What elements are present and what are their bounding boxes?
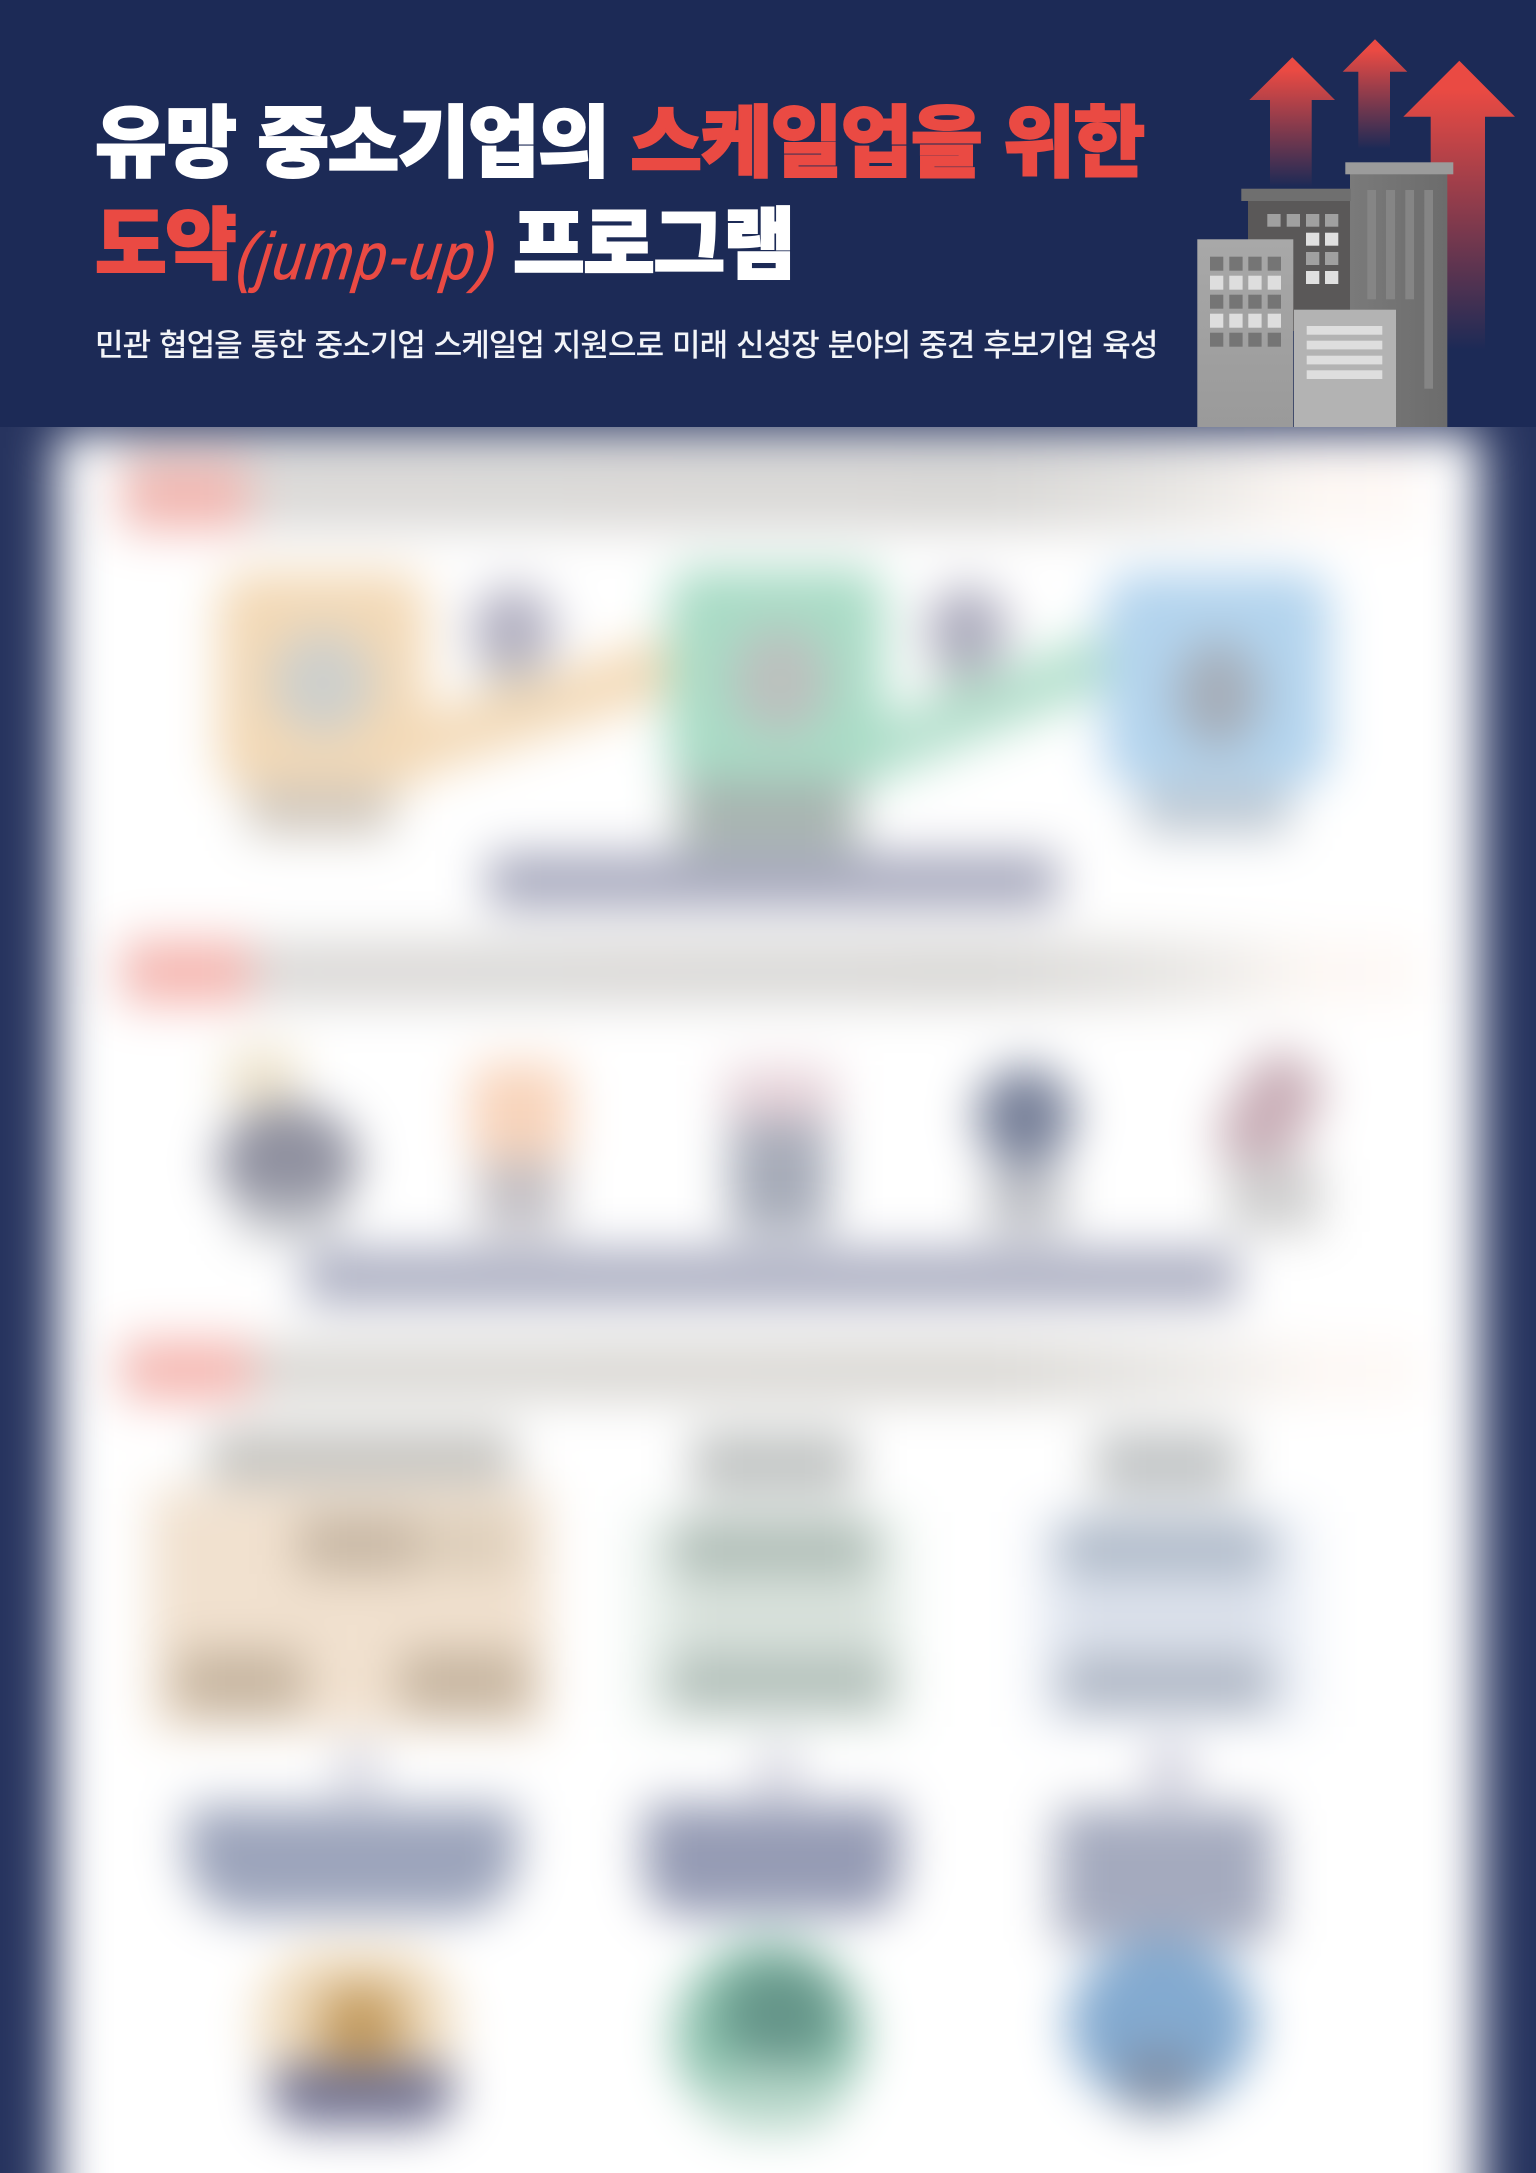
icon 5 (1204, 1038, 1336, 1187)
icon 3 top (725, 1066, 835, 1122)
connector 2 (756, 1746, 800, 1796)
column 1 circle halo (256, 1948, 456, 2066)
icon 2 label (478, 1160, 562, 1234)
column 1 heading (208, 1430, 514, 1484)
hero banner (0, 0, 1536, 427)
column 2 heading (692, 1430, 856, 1498)
connector icon 1 label (480, 665, 546, 689)
arrow: right (1403, 61, 1515, 350)
column 3 middle item (1060, 1590, 1274, 1640)
column 3 top item (1060, 1520, 1272, 1578)
column 1 lower left item (176, 1650, 304, 1716)
title jump-up handwriting: (jump-up) (233, 219, 503, 293)
column 2 circle core (720, 1962, 840, 2068)
building: left (1197, 239, 1293, 427)
building: back tall (1345, 162, 1453, 427)
building: front (1294, 310, 1396, 427)
flow shape: blue (1104, 572, 1330, 786)
section 3 heading band (120, 1342, 1420, 1400)
icon 3 body (730, 1120, 830, 1234)
column 3 navy box (1056, 1808, 1274, 1943)
blue shape label (1140, 785, 1290, 835)
subtitle: 민관 협업을 통한 중소기업 스케일업 지원으로 미래 신성장 분야의 중견 후보기업 육성 (95, 328, 1157, 363)
column 2 navy box (644, 1804, 902, 1916)
title line 2 program: 프로그램 (513, 201, 794, 289)
column 3 circle (1068, 1938, 1256, 2110)
section 2 heading band (120, 940, 1420, 1004)
flow arrow: green to blue (850, 623, 1140, 785)
column 3 circle base (1116, 2048, 1200, 2114)
title line 2 keyword: 도약 (95, 201, 235, 289)
column 1 lower right item (400, 1650, 528, 1716)
illustration: arrows and buildings (1197, 39, 1515, 427)
connector 1 (336, 1746, 380, 1796)
column 3 heading (1095, 1430, 1238, 1498)
section 1 badge (124, 462, 248, 530)
blue shape centre icon (1175, 640, 1261, 750)
column 1 circle core (318, 1985, 404, 2069)
icon 1 top (226, 1048, 298, 1108)
section 2 badge (124, 940, 250, 1004)
column 1 navy box (186, 1806, 518, 1916)
column 2 top item (672, 1520, 876, 1578)
connector icon 2 label (935, 665, 999, 689)
icon 5 label (1226, 1160, 1320, 1232)
orange shape centre icon (270, 630, 376, 736)
panel: white sheet (56, 432, 1481, 2173)
icon 4 label (986, 1165, 1064, 1235)
green shape centre icon (732, 628, 828, 734)
connector icon 2 (926, 586, 1008, 674)
icon 1 label (240, 1200, 340, 1238)
column 2 box (630, 1512, 912, 1727)
section 1 caption bar (488, 854, 1058, 908)
column 1 top item left (298, 1514, 416, 1574)
section 1 heading band (120, 445, 1420, 530)
flow shape: green (668, 568, 884, 786)
flow arrow: orange to green (393, 632, 697, 780)
column 1 circle base (268, 2066, 456, 2126)
connector icon 1 (471, 586, 555, 674)
arrow: middle (1343, 39, 1407, 149)
column 3 lower item (1060, 1654, 1272, 1712)
building: dark middle (1241, 189, 1351, 331)
section 3 badge (124, 1340, 252, 1400)
column 1 box (150, 1488, 548, 1730)
column 3 box (1032, 1512, 1314, 1727)
orange shape label (248, 785, 392, 835)
title line 1: 유망 중소기업의 스케일업을 위한 (95, 99, 1143, 187)
icon 1 circle (218, 1104, 358, 1220)
column 2 lower item (668, 1652, 890, 1712)
arrow: left (1249, 57, 1335, 187)
column 2 circle base (705, 2065, 840, 2131)
column 1 top item right (416, 1514, 516, 1574)
flow shape: orange (218, 572, 426, 792)
column 2 circle (674, 1940, 864, 2130)
icon 2 (470, 1063, 570, 1165)
column 2 middle item (672, 1590, 884, 1640)
icon 4 (976, 1066, 1074, 1166)
section 2 caption bar (304, 1250, 1238, 1304)
connector 3 (1148, 1746, 1192, 1796)
green shape label (678, 780, 858, 852)
